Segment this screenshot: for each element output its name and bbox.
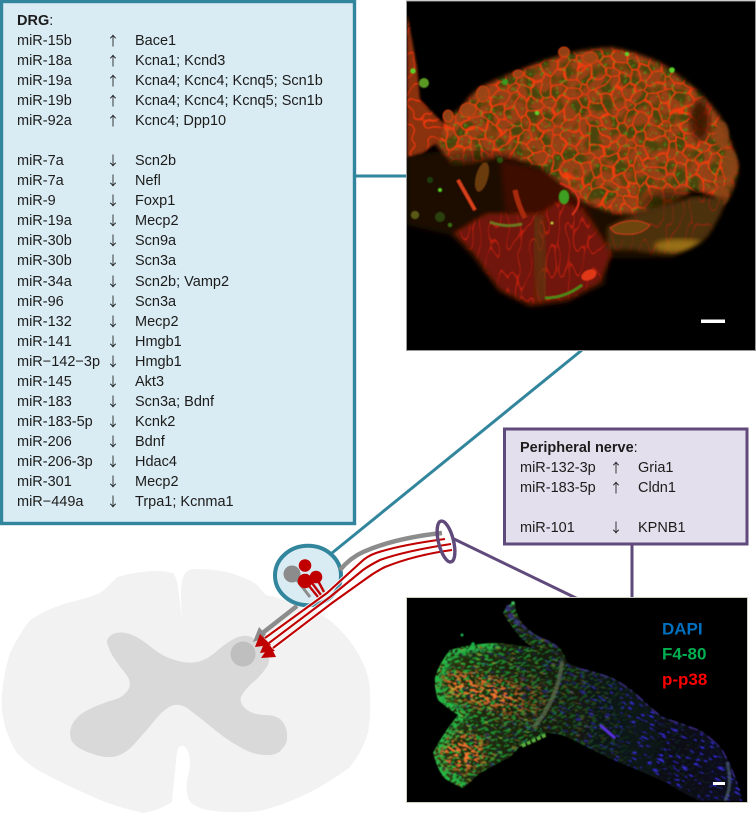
- upregulated miRNAs: Kcna1; Kcnd3: [135, 53, 225, 69]
- dark halo: [407, 150, 725, 308]
- left tissue strip: [407, 14, 444, 158]
- panel: DRG miRNA list: [2, 2, 354, 524]
- downregulated miRNAs: Scn3a: [135, 294, 177, 310]
- downregulated miRNAs: ↓: [106, 492, 120, 510]
- connector: nerve ellipse to nerve micrograph: [454, 539, 578, 599]
- downregulated miRNAs: Kcnk2: [135, 414, 175, 430]
- upregulated miRNAs: miR-19b: [17, 93, 72, 109]
- downregulated miRNAs: ↓: [106, 472, 120, 490]
- downregulated miRNAs: Scn3a; Bdnf: [135, 394, 215, 410]
- downregulated miRNAs: miR-183-5p: [17, 414, 93, 430]
- upregulated miRNAs: ↑: [106, 70, 120, 90]
- downregulated miRNAs: miR-19a: [17, 213, 73, 229]
- green puncta: [410, 52, 675, 227]
- downregulated miRNAs: miR-34a: [17, 274, 73, 290]
- connector: micrograph to DRG circle: [332, 350, 582, 553]
- upregulated miRNAs: ↑: [106, 50, 120, 70]
- downregulated miRNAs: ↓: [106, 230, 120, 250]
- downregulated miRNAs: ↓: [106, 190, 120, 210]
- upregulated miRNAs: Kcnc4; Dpp10: [135, 113, 226, 129]
- loose fragment: [522, 735, 546, 746]
- downregulated miRNAs: Akt3: [135, 374, 164, 390]
- micrograph: dorsal root ganglion: [406, 1, 756, 350]
- downregulated miRNAs: Scn2b; Vamp2: [135, 274, 229, 290]
- red axons with arrowheads: [255, 539, 452, 658]
- scale bar: [701, 320, 725, 323]
- lower red lobe: [450, 195, 615, 310]
- DRG circle: [275, 546, 341, 605]
- icon: neuron cell bodies: [284, 559, 324, 597]
- crush band: [533, 662, 562, 728]
- legend: stains: DAPI: [662, 620, 703, 638]
- nerve miRNA rows: miR-183-5p: [520, 480, 596, 496]
- nerve miRNA rows: ↑: [609, 478, 623, 496]
- green rim on the left: [432, 642, 500, 788]
- downregulated miRNAs: ↓: [106, 170, 120, 190]
- connector: nerve box to nerve micrograph: [630, 544, 634, 599]
- downregulated miRNAs: ↓: [106, 332, 120, 350]
- downregulated miRNAs: miR-206: [17, 434, 72, 450]
- heading: DRG: DRG:: [17, 13, 53, 29]
- downregulated miRNAs: miR-141: [17, 334, 72, 350]
- upper body: [433, 44, 741, 219]
- downregulated miRNAs: Foxp1: [135, 193, 175, 209]
- legend: stains: p-p38: [662, 670, 707, 689]
- nerve miRNA rows: miR-101: [520, 520, 575, 536]
- upregulated miRNAs: miR-19a: [17, 73, 73, 89]
- downregulated miRNAs: ↓: [106, 372, 120, 390]
- micrograph: peripheral nerve: [406, 598, 748, 802]
- spinal cord cross-section: [2, 569, 370, 813]
- lower right olive region: [600, 195, 730, 257]
- downregulated miRNAs: ↓: [106, 452, 120, 470]
- downregulated miRNAs: Hdac4: [135, 454, 177, 470]
- legend: stains: [662, 620, 707, 689]
- heading: peripheral nerve: Peripheral nerve:: [520, 440, 638, 456]
- nerve miRNA rows: ↑: [609, 458, 623, 476]
- downregulated miRNAs: miR-183: [17, 394, 72, 410]
- downregulated miRNAs: miR-145: [17, 374, 72, 390]
- downregulated miRNAs: ↓: [106, 392, 120, 410]
- downregulated miRNAs: Hmgb1: [135, 354, 182, 370]
- downregulated miRNAs: ↓: [106, 272, 120, 290]
- upregulated miRNAs: miR-15b: [17, 33, 72, 49]
- nerve miRNA rows: miR-132-3p: [520, 460, 596, 476]
- downregulated miRNAs: miR-30b: [17, 233, 72, 249]
- downregulated miRNAs: miR-30b: [17, 253, 72, 269]
- panel: peripheral nerve miRNA list: [504, 429, 747, 544]
- connector: DRG box to micrograph: [355, 174, 407, 178]
- grey axon with arrowhead: [253, 533, 442, 642]
- nerve miRNA rows: Gria1: [638, 460, 673, 476]
- right rim: [715, 121, 738, 205]
- nerve miRNA rows: KPNB1: [638, 520, 686, 536]
- grey matter: [70, 632, 287, 757]
- downregulated miRNAs: miR−449a: [17, 494, 84, 510]
- downregulated miRNAs: ↓: [106, 210, 120, 230]
- upregulated miRNAs: miR-92a: [17, 113, 73, 129]
- downregulated miRNAs: Scn9a: [135, 233, 177, 249]
- dark red tissue under the body: [500, 160, 612, 255]
- downregulated miRNAs: ↓: [106, 352, 120, 370]
- upregulated miRNAs: Bace1: [135, 33, 176, 49]
- blue outer edge: [580, 668, 740, 790]
- downregulated miRNAs: Scn2b: [135, 153, 176, 169]
- nerve miRNA rows: Cldn1: [638, 480, 676, 496]
- scale bar: [713, 782, 725, 785]
- downregulated miRNAs: ↓: [106, 250, 120, 270]
- downregulated miRNAs: miR-96: [17, 294, 64, 310]
- downregulated miRNAs: miR-301: [17, 474, 72, 490]
- downregulated miRNAs: miR-206-3p: [17, 454, 93, 470]
- nerve miRNA rows: [520, 458, 686, 536]
- nerve section ellipse: [434, 519, 458, 564]
- downregulated miRNAs: Scn3a: [135, 253, 177, 269]
- dark central tissue details: [458, 180, 475, 210]
- downregulated miRNAs: [17, 150, 234, 510]
- nerve tissue: [432, 603, 743, 802]
- downregulated miRNAs: ↓: [106, 432, 120, 450]
- downregulated miRNAs: Nefl: [135, 173, 161, 189]
- downregulated miRNAs: Hmgb1: [135, 334, 182, 350]
- downregulated miRNAs: ↓: [106, 412, 120, 430]
- upregulated miRNAs: ↑: [106, 90, 120, 110]
- upregulated miRNAs: miR-18a: [17, 53, 73, 69]
- downregulated miRNAs: Mecp2: [135, 314, 179, 330]
- downregulated miRNAs: miR−142−3p: [17, 354, 100, 370]
- upregulated miRNAs: Kcna4; Kcnc4; Kcnq5; Scn1b: [135, 93, 323, 109]
- nerve miRNA rows: ↓: [609, 518, 623, 536]
- downregulated miRNAs: miR-7a: [17, 153, 65, 169]
- downregulated miRNAs: ↓: [106, 312, 120, 330]
- upregulated miRNAs: ↑: [106, 110, 120, 130]
- surface cell lumps: [443, 47, 598, 122]
- upregulated miRNAs: ↑: [106, 30, 120, 50]
- upregulated miRNAs: Kcna4; Kcnc4; Kcnq5; Scn1b: [135, 73, 323, 89]
- white matter: [2, 569, 370, 813]
- downregulated miRNAs: Bdnf: [135, 434, 166, 450]
- upregulated miRNAs: [17, 30, 323, 130]
- downregulated miRNAs: ↓: [106, 292, 120, 310]
- downregulated miRNAs: miR-7a: [17, 173, 65, 189]
- legend: stains: F4-80: [662, 644, 706, 664]
- downregulated miRNAs: Trpa1; Kcnma1: [135, 494, 234, 510]
- downregulated miRNAs: ↓: [106, 150, 120, 170]
- dorsal horn target zone: [230, 642, 256, 666]
- downregulated miRNAs: miR-132: [17, 314, 72, 330]
- downregulated miRNAs: miR-9: [17, 193, 56, 209]
- downregulated miRNAs: Mecp2: [135, 474, 179, 490]
- downregulated miRNAs: Mecp2: [135, 213, 179, 229]
